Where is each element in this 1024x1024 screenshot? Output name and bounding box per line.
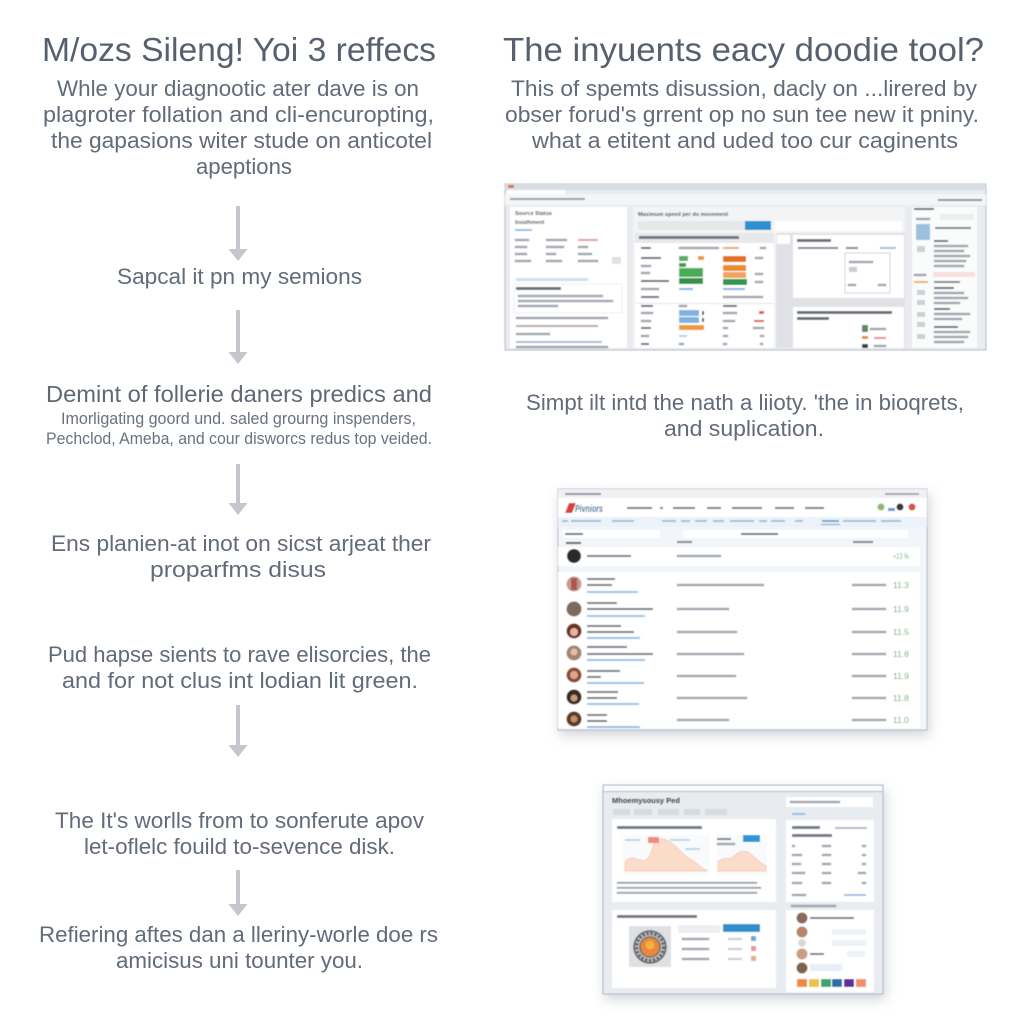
right intro paragraph: This of spemts disussion, dacly on ...lirered by: [511, 76, 977, 101]
arrow 5: [228, 870, 248, 916]
caption under screenshot 1: [526, 390, 964, 441]
screenshot 1: analysis dashboard: [505, 184, 986, 350]
panel: right sidebar: [912, 207, 977, 348]
panel: central comparison table: Maximum speed per do movement: [638, 212, 728, 218]
caption under screenshot 1: Simpt ilt intd the nath a liioty. 'the in bioqrets,: [526, 390, 964, 415]
ranked rows list: 11.5: [893, 627, 909, 637]
ranked rows list: 11.8: [893, 649, 909, 659]
panel: central detail cards: [776, 233, 905, 348]
left intro paragraph: apeptions: [196, 154, 292, 179]
ranked rows list: 11.9: [893, 604, 909, 614]
ranked rows list: 11.0: [893, 715, 909, 725]
bar cluster: green results: [679, 256, 704, 284]
panel: left record: Insidhment: [515, 220, 545, 226]
step text: demint: Pechclod, Ameba, and cour disworcs redus top veided.: [46, 429, 432, 448]
caption under screenshot 1: and suplication.: [664, 416, 824, 441]
step text: worlls: let-oflelc fouild to-sevence disk.: [84, 834, 395, 859]
step text: sapcal: Sapcal it pn my semions: [117, 264, 362, 289]
step text: pud hapse: [48, 642, 431, 693]
panel: left record: [510, 207, 627, 348]
step text: ens planien: [51, 531, 431, 582]
step text: refiering: Refiering aftes dan a lleriny-worle doe rs: [39, 922, 438, 947]
card: stats list: [786, 820, 874, 902]
right intro paragraph: [505, 76, 979, 153]
right intro paragraph: obser forud's grrent op no sun tee new it pniny.: [505, 102, 979, 127]
right intro paragraph: what a etitent and uded too cur caginents: [531, 128, 958, 153]
step text: worlls: [55, 808, 424, 859]
header status icons: [878, 504, 916, 511]
step text: ens planien: proparfms disus: [150, 557, 326, 582]
step text: worlls: The It's worlls from to sonferute apov: [55, 808, 424, 833]
logo: [565, 503, 603, 515]
arrow 4: [228, 705, 248, 757]
arrow 3: [228, 464, 248, 515]
panel: left record: Source Status: [515, 211, 552, 217]
ranked rows list: 11.3: [893, 580, 909, 590]
ranked rows list: [558, 572, 920, 728]
step text: demint: Demint of follerie daners predics and: [46, 381, 432, 407]
top row: +13 %: [893, 551, 909, 561]
screenshot 3: overview dashboard: Mhoemysousy Ped: [612, 796, 680, 805]
arrow 2: [228, 310, 248, 364]
step text: ens planien: Ens planien-at inot on sicst arjeat ther: [51, 531, 431, 556]
filter chips: [613, 809, 727, 815]
bar cluster: orange results: [723, 256, 747, 285]
top row: [558, 547, 920, 566]
navigation items: [627, 507, 824, 509]
step text: pud hapse: Pud hapse sients to rave elisorcies, the: [48, 642, 431, 667]
step text: demint: Imorligating goord und. saled grourng inspenders,: [61, 409, 416, 428]
left intro paragraph: plagroter follation and cli-encuropting,: [43, 102, 434, 127]
left column title: M/ozs Sileng! Yoi 3 reffecs: [42, 31, 436, 68]
left intro paragraph: the gapasions witer stude on anticotel: [51, 128, 432, 153]
left intro paragraph: [43, 76, 434, 179]
logo: Pivniors: [575, 504, 603, 515]
ranked rows list: 11.8: [893, 693, 909, 703]
step text: pud hapse: and for not clus int lodian lit green.: [62, 668, 418, 693]
arrow 1: [228, 206, 248, 261]
ranked rows list: 11.9: [893, 671, 909, 681]
step text: demint: [46, 381, 432, 448]
step text: refiering: amicisus uni tounter you.: [116, 948, 363, 973]
card: people and swatches: [786, 910, 874, 992]
screenshot 2: ranked list: [558, 489, 927, 730]
card: radial gauge: [612, 910, 776, 988]
step text: refiering: [39, 922, 438, 973]
panel: central comparison table: [633, 207, 905, 348]
right column title: The inyuents eacy doodie tool?: [503, 31, 984, 68]
screenshot 3: overview dashboard: [603, 785, 883, 994]
left intro paragraph: Whle your diagnootic ater dave is on: [57, 76, 419, 101]
card: area charts: [612, 819, 776, 902]
